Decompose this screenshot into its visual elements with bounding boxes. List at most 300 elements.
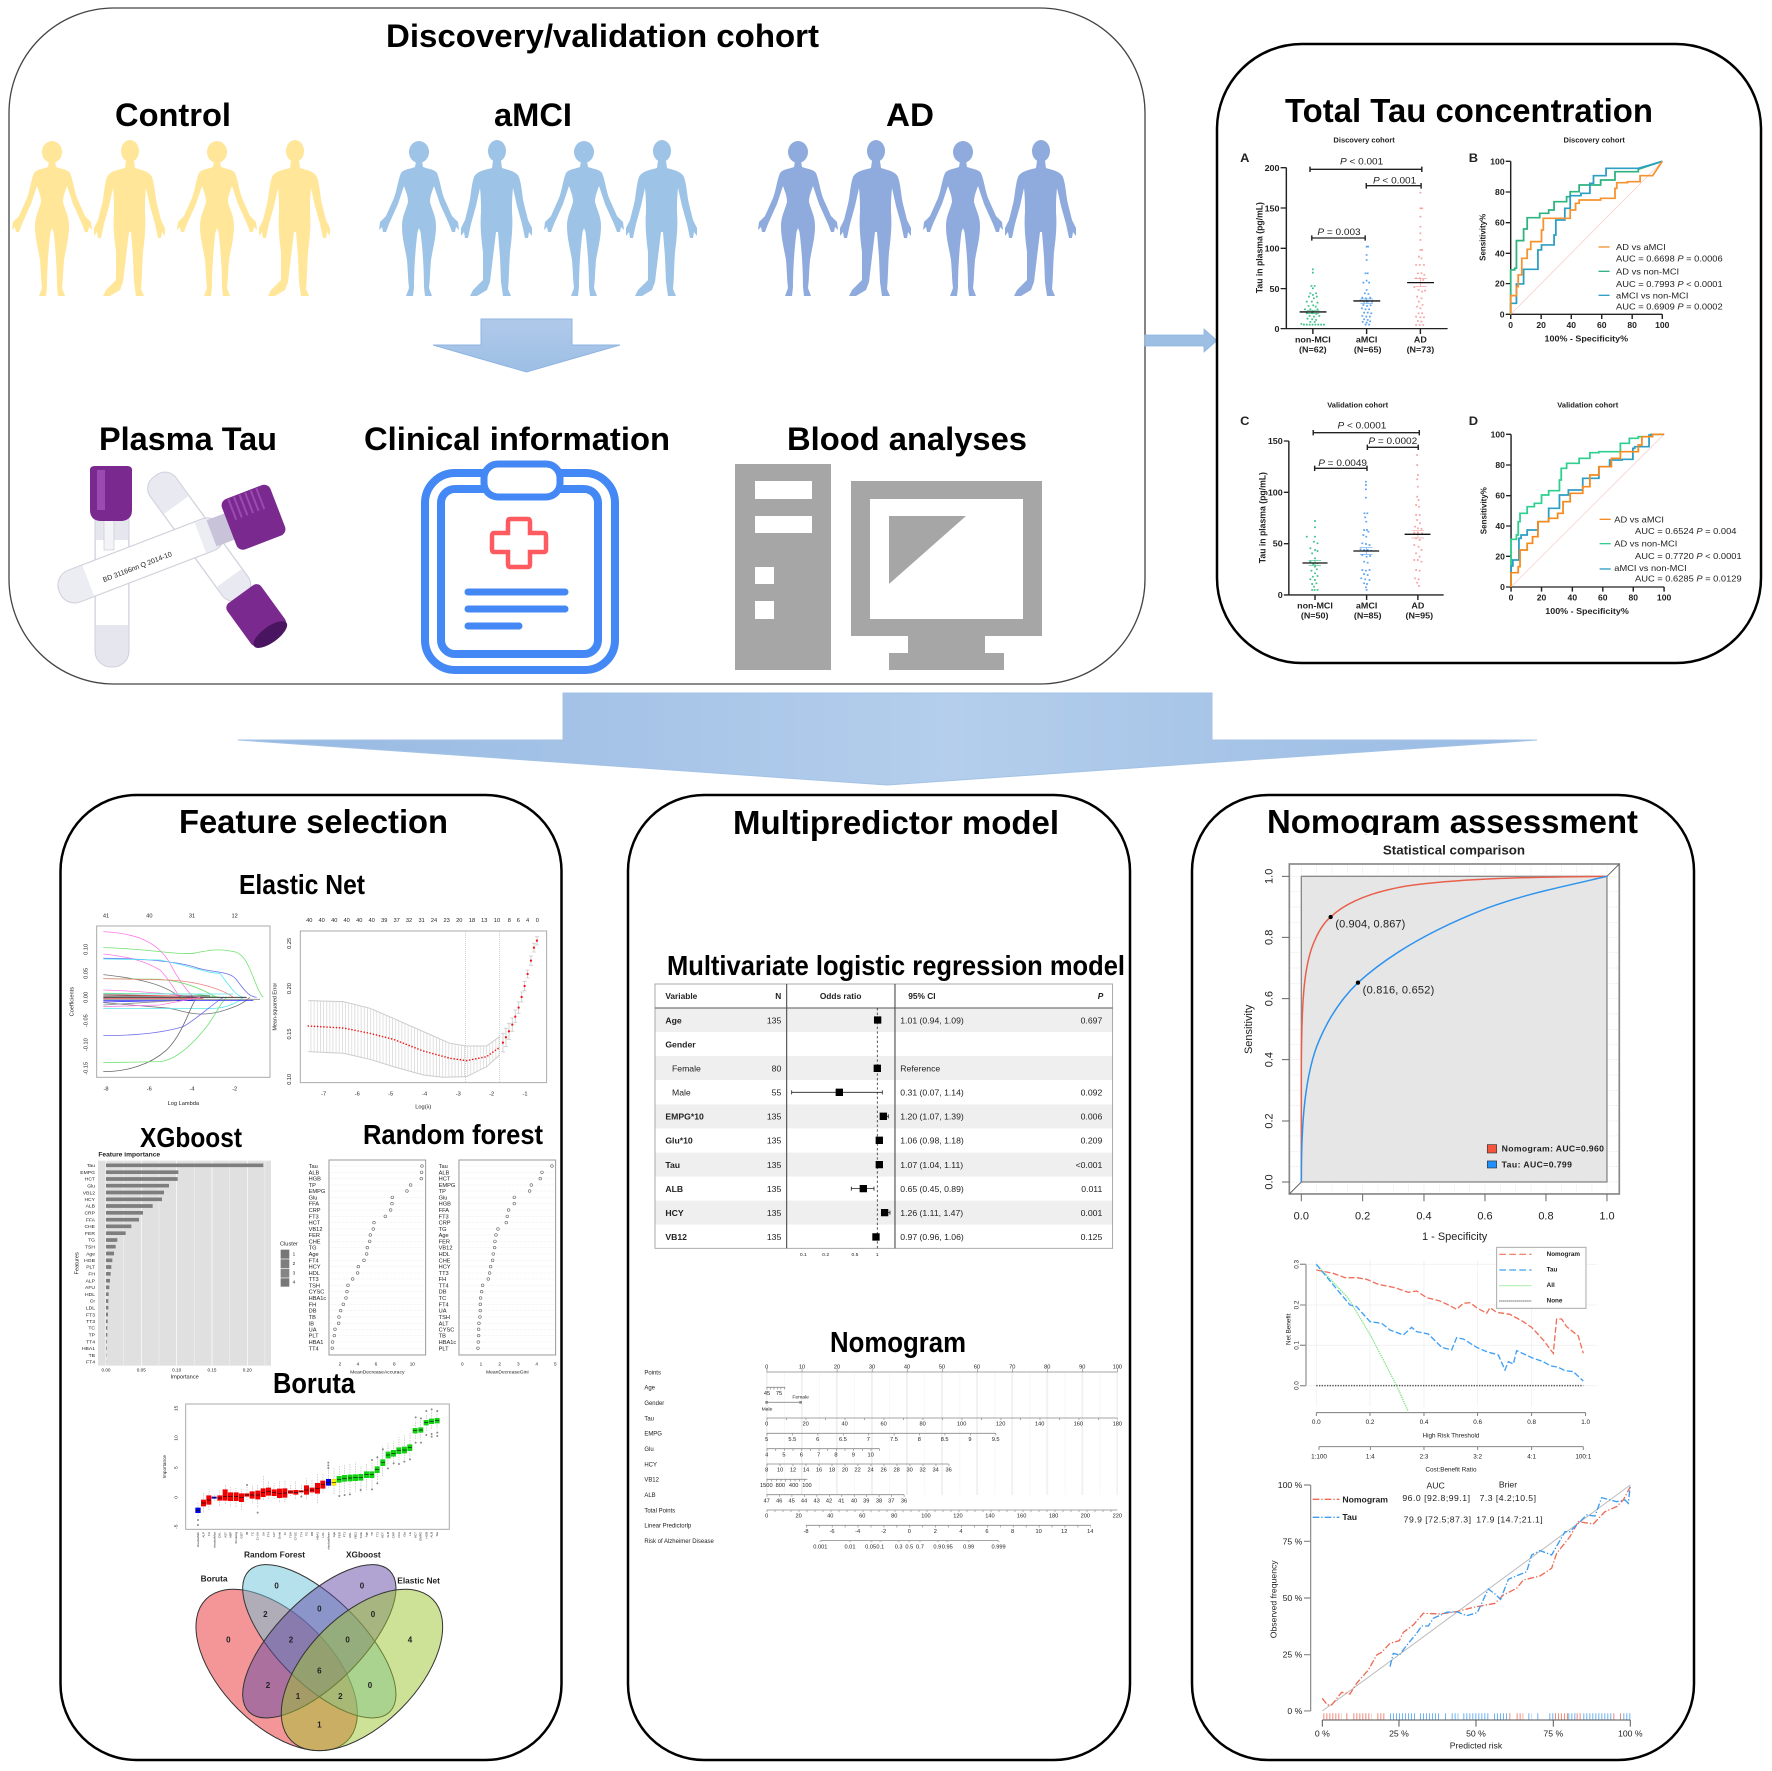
chart: A discovery cohort scatter: A xyxy=(1240,151,1249,165)
chart: elastic net cross-validation: 40 xyxy=(331,918,337,924)
chart: Boruta importance boxplot: CYSC xyxy=(294,1531,298,1540)
chart: C validation cohort scatter: C xyxy=(1240,414,1249,428)
chart: Boruta importance boxplot: TT3 xyxy=(375,1532,379,1537)
heading: Clinical information: Clinical information xyxy=(364,421,670,457)
chart: forest plot table: VB12 xyxy=(665,1232,687,1242)
chart: D validation cohort ROC: 80 xyxy=(1628,593,1638,603)
chart: Boruta importance boxplot: 15 xyxy=(174,1405,180,1411)
chart: D validation cohort ROC: 60 xyxy=(1598,593,1608,603)
chart: C validation cohort scatter: Validation cohort xyxy=(1327,401,1389,409)
chart: four-set Venn diagram: 0 xyxy=(371,1610,376,1619)
chart: forest plot table: 0.31 (0.07, 1.14) xyxy=(900,1088,964,1098)
chart: calibration curve: 50 % xyxy=(1283,1593,1303,1603)
chart: nomogram scales: 10 xyxy=(799,1365,805,1371)
chart: Boruta importance boxplot: GGT xyxy=(239,1532,243,1538)
chart: nomogram scales: 6 xyxy=(800,1452,803,1458)
chart: B discovery cohort ROC: AD vs non-MCI xyxy=(1616,267,1679,276)
chart: nomogram scales: 8 xyxy=(834,1452,838,1458)
panel: nomogram assessment xyxy=(1192,795,1694,1760)
chart: C validation cohort scatter: P < 0.0001 xyxy=(1338,421,1386,431)
chart: random forest mean decrease accuracy: UA xyxy=(309,1327,317,1333)
chart: Boruta importance boxplot: Drink xyxy=(278,1531,282,1539)
chart: ROC statistical comparison: Sensitivity xyxy=(1243,1004,1255,1054)
icon: clipboard xyxy=(425,464,615,670)
chart: nomogram scales: 60 xyxy=(859,1514,865,1520)
chart: D validation cohort ROC: 20 xyxy=(1495,552,1505,561)
chart: Boruta importance boxplot: FT3 xyxy=(343,1532,347,1537)
chart: calibration curve: 100 % xyxy=(1278,1480,1303,1490)
chart: B discovery cohort ROC xyxy=(1469,136,1723,344)
chart: A discovery cohort scatter: Discovery cohort xyxy=(1333,136,1395,145)
chart: XGboost feature importance: ALB xyxy=(86,1204,96,1210)
chart: nomogram scales: 200 xyxy=(1081,1514,1090,1520)
chart: nomogram scales: 18 xyxy=(829,1468,835,1474)
chart: forest plot table: 0.697 xyxy=(1081,1015,1102,1025)
chart: nomogram scales: HCY xyxy=(644,1462,657,1468)
chart: forest plot table: 0.65 (0.45, 0.89) xyxy=(900,1184,964,1194)
chart: forest plot table: 135 xyxy=(767,1232,781,1242)
chart: D validation cohort ROC: AUC = 0.6285 P = 0.0129 xyxy=(1635,574,1742,584)
chart: elastic net cross-validation: Mean-squared Error xyxy=(273,983,279,1030)
chart: nomogram scales: 38 xyxy=(876,1498,882,1504)
chart: decision curve analysis: 0.0 xyxy=(1312,1419,1321,1426)
chart: random forest mean decrease accuracy: HCT xyxy=(309,1221,321,1227)
chart: B discovery cohort ROC: B xyxy=(1469,151,1478,165)
chart: A discovery cohort scatter: Tau in plasma (pg/mL) xyxy=(1254,202,1264,293)
chart: nomogram scales: 80 xyxy=(891,1514,897,1520)
chart: elastic net cross-validation: -2 xyxy=(489,1091,494,1097)
heading: Plasma Tau: Plasma Tau xyxy=(99,421,277,457)
chart: B discovery cohort ROC: AUC = 0.7993 P < 0.0001 xyxy=(1616,279,1723,289)
chart: elastic net coefficient paths: 40 xyxy=(146,913,152,919)
chart: calibration curve: Predicted risk xyxy=(1450,1740,1503,1750)
chart: D validation cohort ROC: 100 xyxy=(1491,430,1505,439)
chart: Boruta importance boxplot: 0 xyxy=(174,1496,180,1499)
chart: four-set Venn diagram: XGboost xyxy=(346,1549,381,1559)
chart: calibration curve: 7.3 [4.2;10.5] xyxy=(1480,1493,1536,1503)
chart: nomogram scales: 0.9 xyxy=(933,1544,941,1550)
chart: Boruta importance boxplot: HCT xyxy=(413,1532,417,1538)
chart: C validation cohort scatter: AD xyxy=(1411,601,1424,610)
chart: nomogram scales: Risk of Alzheimer Disease xyxy=(644,1539,715,1545)
chart: D validation cohort ROC: Sensitivity% xyxy=(1478,487,1488,534)
chart: Boruta importance boxplot: Cr xyxy=(283,1532,287,1535)
chart: nomogram scales: 34 xyxy=(932,1468,939,1474)
chart: calibration curve xyxy=(1269,1479,1643,1750)
chart: elastic net cross-validation: -5 xyxy=(388,1091,393,1097)
chart: A discovery cohort scatter: 100 xyxy=(1265,244,1280,254)
chart: elastic net cross-validation: 39 xyxy=(381,918,387,924)
chart: nomogram scales: 28 xyxy=(893,1468,900,1474)
heading: Nomogram: Nomogram xyxy=(830,1327,966,1359)
chart: nomogram scales: Glu xyxy=(644,1447,654,1453)
chart: Boruta importance boxplot: ALB xyxy=(386,1532,390,1538)
chart: elastic net coefficient paths: 41 xyxy=(103,913,109,919)
chart: D validation cohort ROC: 20 xyxy=(1537,593,1547,603)
chart: B discovery cohort ROC: AUC = 0.6698 P = 0.0006 xyxy=(1616,254,1723,264)
heading: aMCI: aMCI xyxy=(494,97,572,133)
chart: four-set Venn diagram: 1 xyxy=(296,1692,301,1701)
chart: elastic net cross-validation: 0 xyxy=(536,918,539,924)
chart: ROC statistical comparison: 1 - Specificity xyxy=(1422,1231,1488,1243)
chart: decision curve analysis: 0.0 xyxy=(1293,1381,1300,1390)
icon: blood tubes xyxy=(50,464,292,667)
chart: random forest mean decrease accuracy: CHE xyxy=(309,1239,321,1245)
chart: C validation cohort scatter: P = 0.0002 xyxy=(1368,436,1417,447)
chart: nomogram scales: 0 xyxy=(765,1514,768,1520)
chart: Boruta importance boxplot: Glu xyxy=(402,1532,406,1537)
chart: random forest mean decrease gini: 2 xyxy=(498,1361,501,1366)
chart: random forest mean decrease accuracy: 6 xyxy=(375,1361,378,1366)
chart: nomogram scales: 10 xyxy=(1035,1529,1042,1535)
chart: forest plot table: <0.001 xyxy=(1076,1160,1102,1170)
chart: random forest mean decrease accuracy: TP xyxy=(309,1183,316,1189)
chart: B discovery cohort ROC: 80 xyxy=(1627,320,1637,330)
chart: nomogram scales: 20 xyxy=(834,1365,840,1371)
chart: elastic net cross-validation: 18 xyxy=(469,918,475,924)
chart: XGboost feature importance: AFU xyxy=(85,1285,95,1291)
chart: A discovery cohort scatter: (N=73) xyxy=(1407,345,1434,354)
chart: XGboost feature importance: CRP xyxy=(84,1211,96,1217)
chart: random forest mean decrease gini: DB xyxy=(439,1290,447,1296)
chart: decision curve analysis: Cost:Benefit Ratio xyxy=(1425,1466,1477,1473)
chart: random forest mean decrease gini: Glu xyxy=(439,1195,447,1201)
chart: ROC statistical comparison: 0.8 xyxy=(1264,930,1276,945)
chart: calibration curve: 75 % xyxy=(1543,1729,1563,1739)
chart: ROC statistical comparison: 1.0 xyxy=(1264,869,1276,884)
chart: nomogram scales: 80 xyxy=(1044,1365,1050,1371)
chart: XGboost feature importance: TB xyxy=(89,1353,96,1359)
chart: random forest mean decrease accuracy: HCY xyxy=(309,1265,321,1271)
chart: nomogram scales: 7.5 xyxy=(890,1437,898,1443)
chart: nomogram scales: 8.5 xyxy=(941,1437,949,1443)
chart: random forest mean decrease accuracy: Age xyxy=(309,1252,319,1258)
chart: calibration curve: 79.9 [72.5;87.3] xyxy=(1404,1515,1471,1525)
chart: calibration curve: 75 % xyxy=(1283,1536,1303,1546)
chart: XGboost feature importance: 2 xyxy=(293,1261,296,1266)
chart: ROC statistical comparison: (0.816, 0.652) xyxy=(1363,984,1434,996)
chart: nomogram scales: Tau xyxy=(644,1416,654,1422)
chart: decision curve analysis: 0.6 xyxy=(1473,1419,1483,1426)
chart: nomogram scales: 39 xyxy=(863,1498,869,1504)
chart: D validation cohort ROC: 60 xyxy=(1495,491,1505,501)
arrow: down to measurements xyxy=(433,319,620,372)
chart: random forest mean decrease gini xyxy=(439,1160,557,1375)
chart: XGboost feature importance: TP xyxy=(89,1333,96,1339)
chart: random forest mean decrease accuracy: TSH xyxy=(309,1283,320,1289)
chart: random forest mean decrease gini: CYSC xyxy=(439,1327,454,1333)
icon: computer xyxy=(735,464,1042,670)
icon group: control people xyxy=(12,140,330,296)
chart: nomogram scales: EMPG xyxy=(644,1432,662,1438)
chart: nomogram scales: 45 xyxy=(789,1498,795,1504)
arrow: cohort to tau concentration xyxy=(1145,329,1217,352)
chart: ROC statistical comparison: Nomogram: AUC=0.960 xyxy=(1502,1143,1604,1153)
title: Feature selection: Feature selection xyxy=(179,803,448,840)
chart: calibration curve: 100 % xyxy=(1618,1729,1643,1739)
chart: Boruta importance boxplot: LDL xyxy=(321,1532,325,1537)
chart: four-set Venn diagram: 0 xyxy=(345,1635,350,1644)
chart: elastic net cross-validation xyxy=(273,918,547,1111)
chart: random forest mean decrease accuracy: Tau xyxy=(309,1164,318,1170)
chart: random forest mean decrease gini: FT4 xyxy=(439,1302,449,1308)
chart: elastic net cross-validation: 37 xyxy=(393,918,400,924)
chart: forest plot table: 135 xyxy=(767,1184,781,1194)
chart: elastic net cross-validation: 0.20 xyxy=(287,983,293,994)
chart: nomogram scales: 100 xyxy=(957,1422,966,1428)
chart: Boruta importance boxplot: TP xyxy=(370,1532,374,1536)
title: Discovery/validation cohort: Discovery/validation cohort xyxy=(386,18,819,54)
heading: Boruta: Boruta xyxy=(273,1368,356,1400)
chart: B discovery cohort ROC: Sensitivity% xyxy=(1477,213,1488,261)
icon group: AD people xyxy=(758,140,1076,296)
icon group: aMCI people xyxy=(379,140,697,296)
chart: random forest mean decrease accuracy: CYSC xyxy=(309,1290,324,1296)
chart: decision curve analysis: 100:1 xyxy=(1575,1454,1592,1461)
chart: ROC statistical comparison: 0.6 xyxy=(1264,991,1276,1006)
chart: four-set Venn diagram: 6 xyxy=(317,1666,322,1675)
chart: XGboost feature importance: VB12 xyxy=(83,1190,95,1196)
chart: A discovery cohort scatter xyxy=(1240,136,1448,354)
chart: random forest mean decrease gini: Age xyxy=(439,1233,449,1239)
chart: forest plot table: Odds ratio xyxy=(820,991,861,1001)
chart: random forest mean decrease gini: TSH xyxy=(439,1315,450,1321)
chart: Boruta importance boxplot: CHE xyxy=(359,1532,363,1538)
chart: forest plot table: Female xyxy=(672,1064,701,1074)
chart: decision curve analysis xyxy=(1285,1247,1597,1473)
chart: decision curve analysis: 2:3 xyxy=(1420,1454,1429,1461)
chart: nomogram scales: 0 xyxy=(765,1365,768,1371)
chart: elastic net cross-validation: 31 xyxy=(418,918,425,924)
chart: elastic net coefficient paths: 0.05 xyxy=(84,968,90,979)
chart: nomogram scales: Male xyxy=(762,1406,773,1412)
chart: decision curve analysis: Tau xyxy=(1547,1267,1558,1274)
chart: nomogram scales: 44 xyxy=(801,1498,807,1504)
chart: calibration curve: 25 % xyxy=(1389,1729,1409,1739)
chart: nomogram scales: -2 xyxy=(881,1529,886,1535)
chart: random forest mean decrease gini: UA xyxy=(439,1309,447,1315)
chart: elastic net coefficient paths: -2 xyxy=(232,1087,237,1093)
chart: XGboost feature importance: FT4 xyxy=(86,1360,95,1366)
chart: random forest mean decrease gini: HBA1c xyxy=(439,1340,456,1346)
chart: elastic net cross-validation: 8 xyxy=(508,918,511,924)
chart: C validation cohort scatter xyxy=(1240,401,1444,620)
chart: XGboost feature importance: Feature importance xyxy=(98,1152,160,1159)
chart: nomogram scales: 24 xyxy=(867,1468,874,1474)
chart: XGboost feature importance: TC xyxy=(88,1326,95,1332)
chart: calibration curve: Tau xyxy=(1342,1512,1357,1522)
chart: nomogram scales: 12 xyxy=(790,1468,796,1474)
chart: random forest mean decrease accuracy: ALB xyxy=(309,1170,320,1176)
chart: random forest mean decrease gini: CHE xyxy=(439,1258,451,1264)
chart: nomogram scales: 220 xyxy=(1113,1514,1122,1520)
chart: elastic net cross-validation: 0.15 xyxy=(287,1028,293,1039)
panel: total tau concentration xyxy=(1217,44,1761,663)
chart: Boruta importance boxplot: Smoking xyxy=(234,1532,238,1544)
chart: random forest mean decrease gini: FER xyxy=(439,1239,450,1245)
chart: four-set Venn diagram: 1 xyxy=(317,1720,322,1729)
chart: Boruta importance boxplot: FH xyxy=(207,1532,211,1536)
chart: elastic net cross-validation: 10 xyxy=(494,918,500,924)
chart: Boruta importance boxplot: HCY xyxy=(381,1532,385,1538)
chart: random forest mean decrease accuracy: VB12 xyxy=(309,1227,322,1233)
chart: forest plot table: 1.01 (0.94, 1.09) xyxy=(900,1015,964,1025)
chart: C validation cohort scatter: P = 0.0049 xyxy=(1318,458,1367,469)
chart: elastic net cross-validation: 40 xyxy=(356,918,362,924)
chart: B discovery cohort ROC: 100 xyxy=(1490,157,1505,166)
chart: random forest mean decrease gini: 1 xyxy=(480,1361,483,1366)
chart: random forest mean decrease accuracy: FH xyxy=(309,1302,316,1308)
arrow: large arrow to lower panels xyxy=(238,693,1537,785)
chart: XGboost feature importance: FER xyxy=(85,1231,95,1237)
chart: Boruta importance boxplot: 10 xyxy=(174,1435,180,1441)
chart: four-set Venn diagram: 0 xyxy=(360,1582,365,1591)
chart: C validation cohort scatter: 100 xyxy=(1268,488,1283,497)
chart: four-set Venn diagram: Elastic Net xyxy=(397,1575,440,1585)
chart: random forest mean decrease accuracy: Glu xyxy=(309,1195,317,1201)
chart: forest plot table: 135 xyxy=(767,1136,781,1146)
chart: XGboost feature importance: LDL xyxy=(86,1305,95,1311)
chart: nomogram scales: 30 xyxy=(869,1365,875,1371)
chart: random forest mean decrease gini: FT3 xyxy=(439,1214,449,1220)
chart: D validation cohort ROC: aMCI vs non-MCI xyxy=(1614,563,1687,573)
chart: forest plot table: Variable xyxy=(665,991,698,1001)
chart: calibration curve: 17.9 [14.7;21.1] xyxy=(1476,1515,1543,1525)
chart: B discovery cohort ROC: 100 xyxy=(1655,320,1670,330)
chart: random forest mean decrease gini: ALT xyxy=(439,1321,449,1327)
chart: nomogram scales: 100 xyxy=(1113,1365,1122,1371)
chart: nomogram scales: 36 xyxy=(901,1498,907,1504)
chart: XGboost feature importance: 1 xyxy=(293,1252,296,1257)
title: Total Tau concentration: Total Tau concentration xyxy=(1285,92,1653,129)
chart: random forest mean decrease accuracy: PLT xyxy=(309,1334,319,1340)
chart: B discovery cohort ROC: 20 xyxy=(1536,320,1546,330)
chart: XGboost feature importance: Tau xyxy=(87,1163,95,1169)
chart: nomogram scales: 20 xyxy=(796,1514,802,1520)
chart: nomogram scales: 80 xyxy=(919,1422,926,1428)
chart: decision curve analysis: 3:2 xyxy=(1473,1454,1483,1461)
chart: forest plot table: N xyxy=(775,991,781,1001)
chart: XGboost feature importance: 4 xyxy=(293,1280,296,1285)
chart: nomogram scales: -8 xyxy=(803,1529,808,1535)
chart: random forest mean decrease accuracy: HBA1c xyxy=(309,1296,326,1302)
chart: elastic net coefficient paths: -8 xyxy=(103,1087,109,1093)
chart: Boruta importance boxplot: TSH xyxy=(288,1532,292,1538)
chart: elastic net cross-validation: 23 xyxy=(443,918,450,924)
chart: four-set Venn diagram: 0 xyxy=(368,1681,373,1690)
chart: XGboost feature importance: TT3 xyxy=(86,1319,95,1325)
chart: Boruta importance boxplot: UA xyxy=(261,1532,265,1536)
chart: XGboost feature importance: 0.10 xyxy=(172,1368,182,1373)
chart: B discovery cohort ROC: 80 xyxy=(1495,187,1505,197)
chart: nomogram scales: 0.01 xyxy=(844,1544,855,1550)
chart: four-set Venn diagram: 0 xyxy=(274,1582,279,1591)
chart: forest plot table: EMPG*10 xyxy=(665,1112,704,1122)
chart: elastic net coefficient paths xyxy=(70,913,270,1107)
chart: nomogram scales: 9 xyxy=(968,1437,972,1443)
chart: D validation cohort ROC: AUC = 0.6524 P = 0.004 xyxy=(1635,526,1736,536)
chart: nomogram scales: 8 xyxy=(765,1468,768,1474)
chart: XGboost feature importance: Importance xyxy=(171,1374,199,1380)
chart: random forest mean decrease accuracy: FFA xyxy=(309,1202,319,1208)
heading: AD: AD xyxy=(886,97,934,133)
chart: nomogram scales: 43 xyxy=(813,1498,820,1504)
chart: calibration curve: Observed frequency xyxy=(1269,1560,1279,1638)
chart: ROC statistical comparison xyxy=(1243,842,1619,1243)
chart: A discovery cohort scatter: P < 0.001 xyxy=(1373,176,1416,186)
chart: XGboost feature importance: HCY xyxy=(84,1197,96,1203)
chart: Boruta importance boxplot: ALT xyxy=(272,1532,276,1537)
chart: four-set Venn diagram: 2 xyxy=(263,1610,268,1619)
chart: random forest mean decrease gini: 5 xyxy=(554,1361,557,1366)
chart: forest plot table: P xyxy=(1098,991,1104,1001)
chart: Boruta importance boxplot: Age xyxy=(364,1532,368,1537)
chart: Boruta importance boxplot: HBA1 xyxy=(316,1532,320,1540)
chart: nomogram scales: 0 xyxy=(908,1529,911,1535)
chart: random forest mean decrease gini: MeanDecreaseGini xyxy=(486,1369,529,1375)
chart: nomogram scales: Points xyxy=(644,1370,661,1376)
chart: elastic net cross-validation: -6 xyxy=(355,1091,360,1097)
chart: nomogram scales: 800 xyxy=(776,1483,785,1489)
chart: A discovery cohort scatter: P < 0.001 xyxy=(1340,157,1383,167)
chart: decision curve analysis: High Risk Threshold xyxy=(1423,1433,1480,1440)
title: Nomogram assessment: Nomogram assessment xyxy=(1267,803,1638,840)
chart: forest plot table: 0.092 xyxy=(1081,1088,1102,1098)
chart: decision curve analysis: 4:1 xyxy=(1527,1454,1537,1461)
chart: A discovery cohort scatter: non-MCI xyxy=(1295,335,1331,345)
chart: four-set Venn diagram: 2 xyxy=(289,1635,294,1644)
chart: nomogram scales: 0.3 xyxy=(895,1544,903,1550)
chart: nomogram scales: 160 xyxy=(1074,1422,1083,1428)
chart: nomogram scales: 37 xyxy=(888,1498,894,1504)
chart: nomogram scales: 9 xyxy=(852,1452,855,1458)
chart: nomogram scales: 36 xyxy=(945,1468,952,1474)
chart: random forest mean decrease gini: TG xyxy=(439,1227,446,1233)
chart: C validation cohort scatter: (N=95) xyxy=(1406,611,1433,620)
chart: XGboost feature importance: FH xyxy=(88,1272,95,1278)
chart: XGboost feature importance: HGB xyxy=(84,1258,96,1264)
chart: nomogram scales: 45 xyxy=(764,1391,770,1397)
chart: random forest mean decrease gini: ALB xyxy=(439,1170,450,1176)
chart: nomogram scales: ALB xyxy=(644,1493,656,1499)
chart: Boruta importance boxplot: Age xyxy=(332,1532,336,1537)
chart: calibration curve: 0 % xyxy=(1315,1729,1330,1739)
chart: elastic net cross-validation: 13 xyxy=(481,918,487,924)
chart: XGboost feature importance: ALP xyxy=(86,1278,96,1284)
chart: nomogram scales: 0 xyxy=(765,1422,768,1428)
chart: Boruta importance boxplot: CRP xyxy=(392,1532,396,1538)
chart: Boruta importance boxplot: FFA xyxy=(397,1532,401,1537)
chart: nomogram scales: 40 xyxy=(904,1365,910,1371)
chart: ROC statistical comparison: 0.0 xyxy=(1264,1174,1276,1190)
chart: random forest mean decrease accuracy: DB xyxy=(309,1309,317,1315)
chart: ROC statistical comparison: 0.2 xyxy=(1264,1113,1276,1129)
chart: XGboost feature importance: Age xyxy=(86,1251,95,1257)
chart: Boruta importance boxplot: 5 xyxy=(174,1466,180,1469)
chart: XGboost feature importance xyxy=(75,1152,298,1380)
chart: XGboost feature importance: Glu xyxy=(87,1183,95,1189)
chart: nomogram scales: 0.05 xyxy=(865,1544,876,1550)
chart: nomogram scales: 120 xyxy=(996,1422,1005,1428)
chart: decision curve analysis: 1:4 xyxy=(1366,1454,1375,1461)
chart: nomogram scales xyxy=(644,1365,1122,1550)
chart: calibration curve: 96.0 [92.8;99.1] xyxy=(1402,1493,1470,1503)
chart: nomogram scales: 100 xyxy=(921,1514,931,1520)
chart: C validation cohort scatter: 150 xyxy=(1268,436,1283,446)
chart: Boruta importance boxplot: shadowMin xyxy=(196,1532,200,1547)
chart: forest plot table: Male xyxy=(672,1088,691,1098)
chart: nomogram scales: 40 xyxy=(851,1498,857,1504)
